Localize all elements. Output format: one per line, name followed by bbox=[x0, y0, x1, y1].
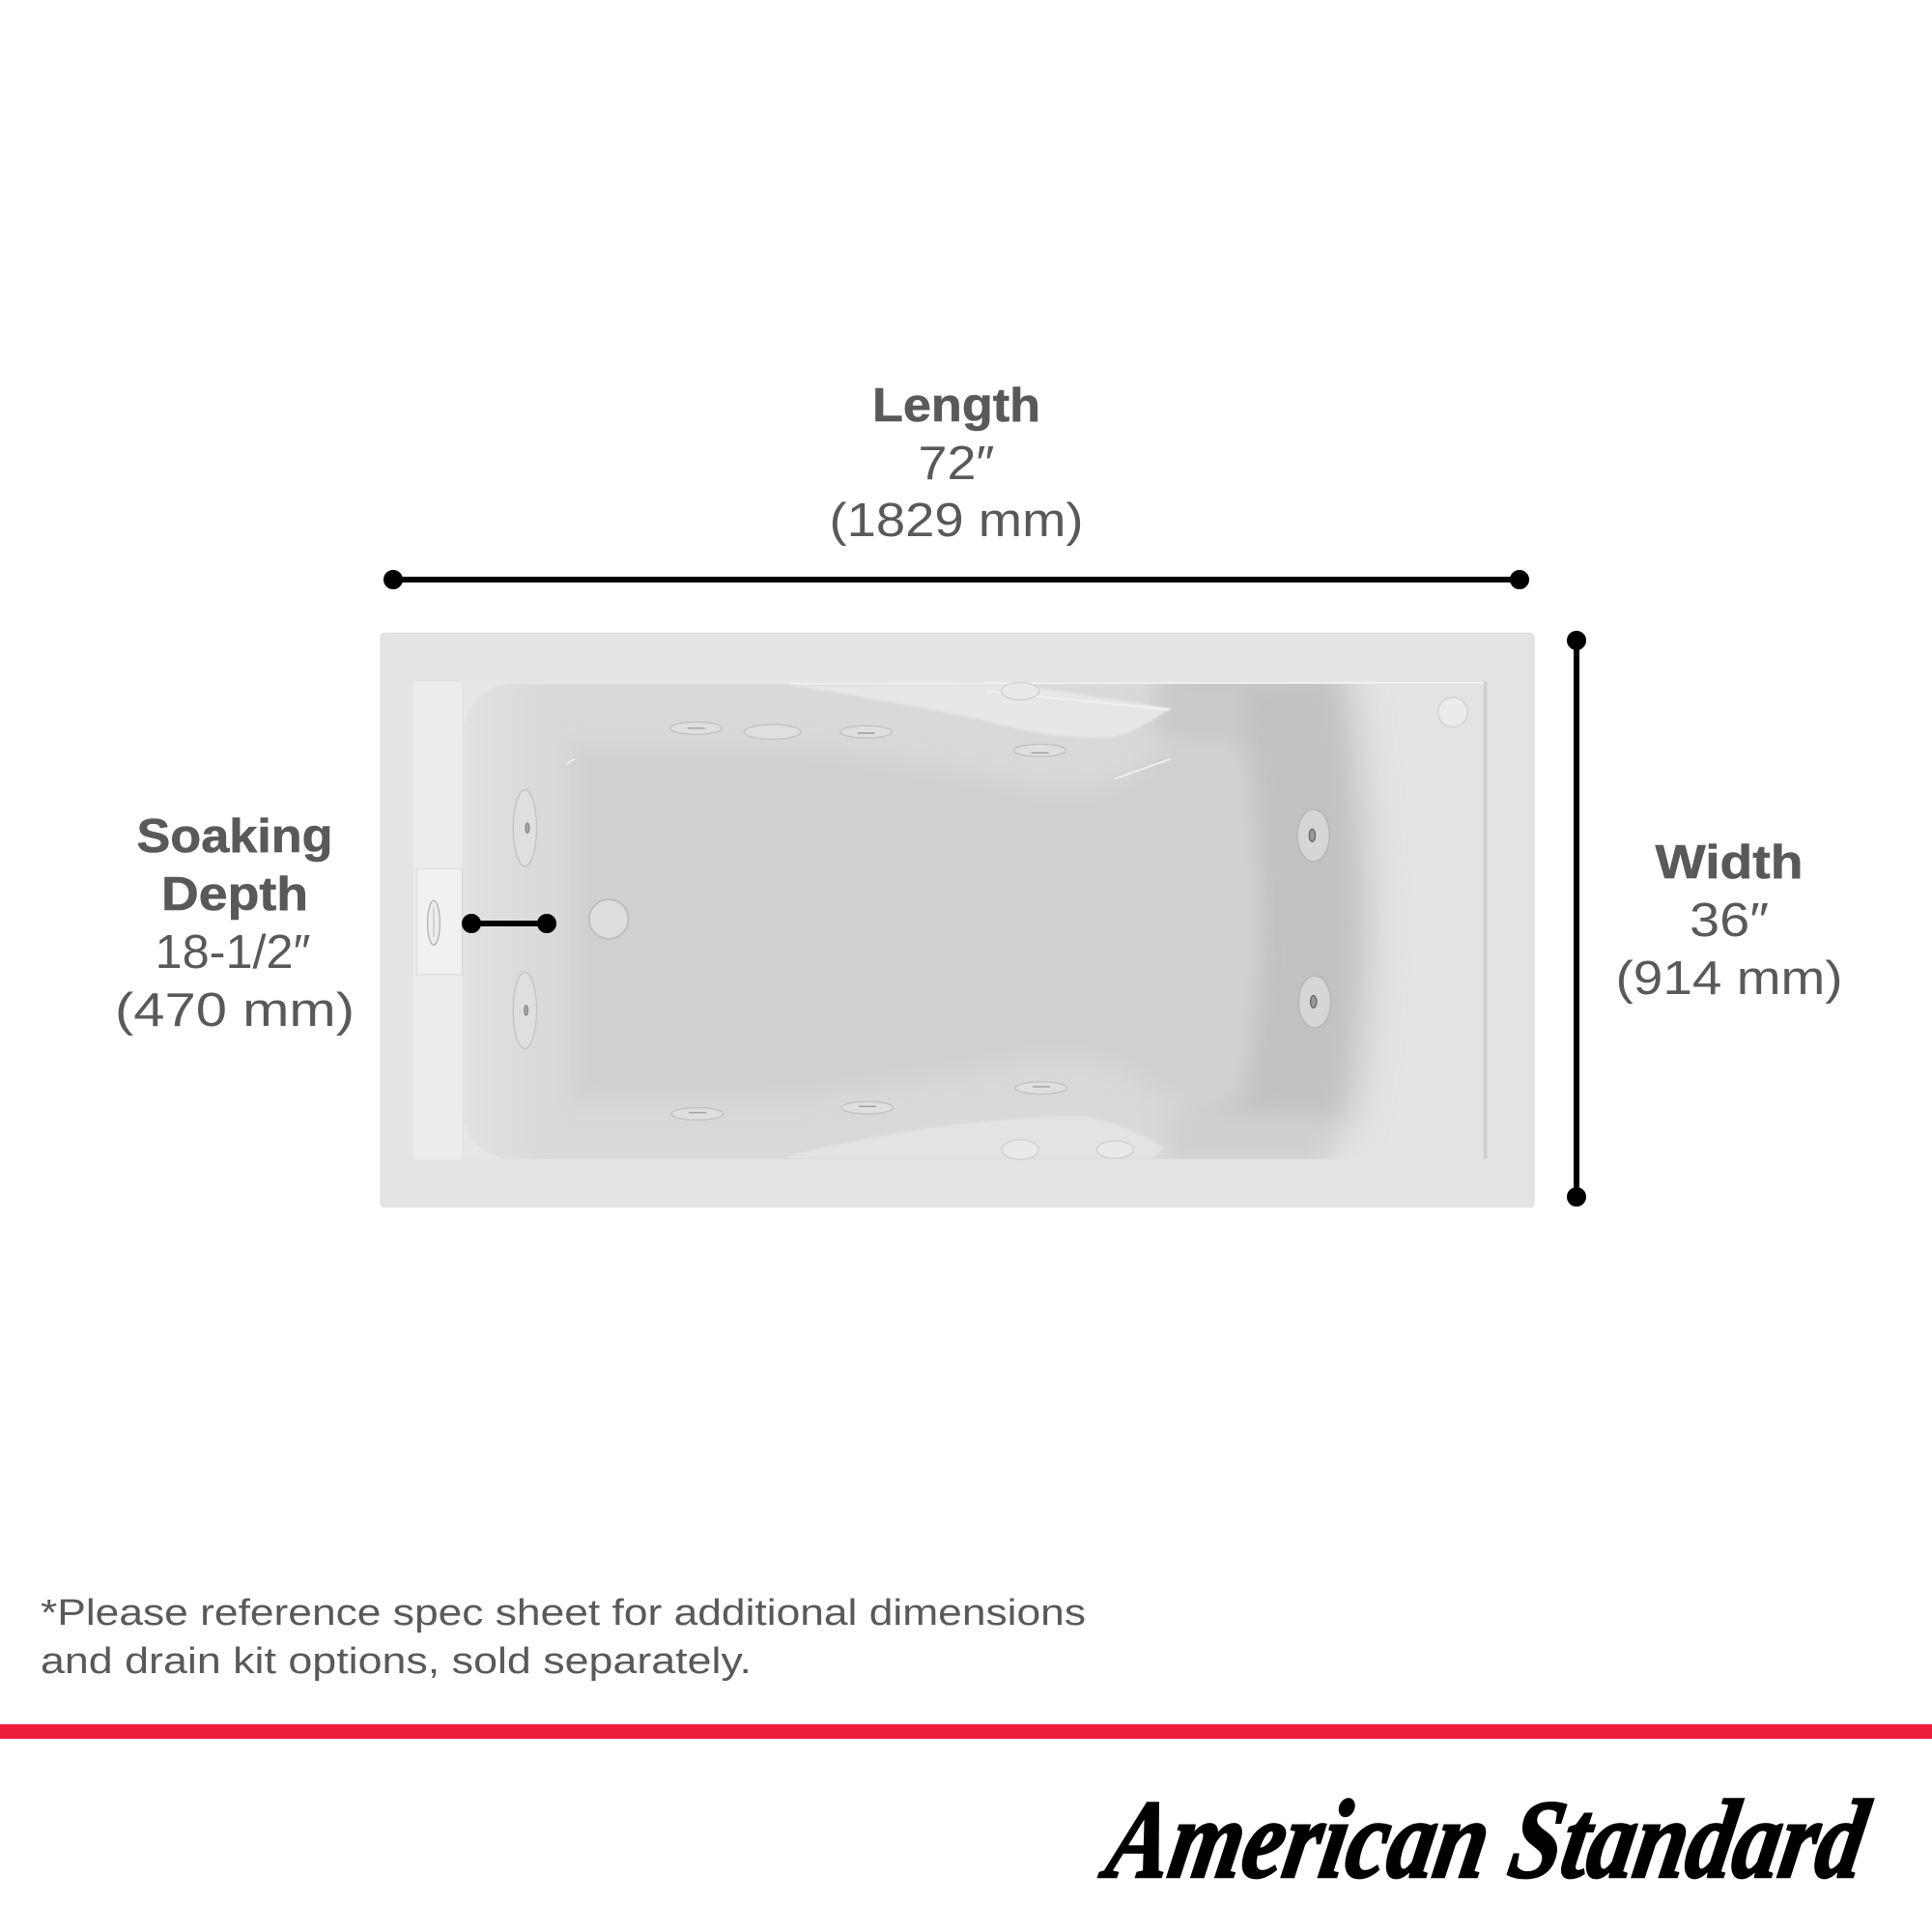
basin floor bbox=[583, 757, 1214, 1088]
soaking depth dimension line bbox=[465, 917, 554, 930]
wing highlights bbox=[567, 683, 1485, 779]
footnote bbox=[41, 1593, 1086, 1682]
width label bbox=[1615, 837, 1843, 1005]
basin well shading bbox=[503, 684, 1385, 1159]
tub outer deck bbox=[381, 634, 1534, 1207]
width label: Width bbox=[1656, 837, 1803, 889]
length heading: Length bbox=[872, 380, 1040, 432]
deck controls bbox=[1001, 683, 1467, 1159]
drain bbox=[589, 899, 629, 939]
upper side jets bbox=[670, 722, 1065, 756]
soaking depth label: 18-1/2″ bbox=[155, 926, 311, 979]
overflow plate bbox=[416, 868, 462, 975]
bathtub bbox=[381, 634, 1534, 1207]
soaking depth label: Soaking bbox=[137, 810, 332, 863]
footnote: and drain kit options, sold separately. bbox=[41, 1641, 752, 1682]
width label: (914 mm) bbox=[1615, 952, 1843, 1005]
length heading: (1829 mm) bbox=[829, 495, 1084, 547]
soaking depth label bbox=[115, 810, 355, 1037]
tub inner basin bbox=[520, 682, 1488, 1159]
width dimension line bbox=[1570, 634, 1583, 1204]
length heading: 72″ bbox=[918, 438, 995, 490]
footnote: *Please reference spec sheet for additional dimensions bbox=[41, 1593, 1086, 1634]
soaking depth label: (470 mm) bbox=[115, 984, 355, 1037]
soaking depth label: Depth bbox=[161, 868, 308, 921]
right wall jets bbox=[1297, 810, 1331, 1028]
lower side jets bbox=[671, 1082, 1067, 1120]
right bevel bbox=[1484, 681, 1488, 1159]
width label: 36″ bbox=[1690, 895, 1769, 947]
length heading bbox=[829, 380, 1084, 547]
left wall jets bbox=[513, 790, 536, 1048]
upper lumbar wing bbox=[788, 685, 1171, 738]
length dimension line bbox=[386, 573, 1526, 586]
lower lumbar wing bbox=[788, 1117, 1164, 1158]
red divider bar bbox=[0, 1724, 1932, 1739]
